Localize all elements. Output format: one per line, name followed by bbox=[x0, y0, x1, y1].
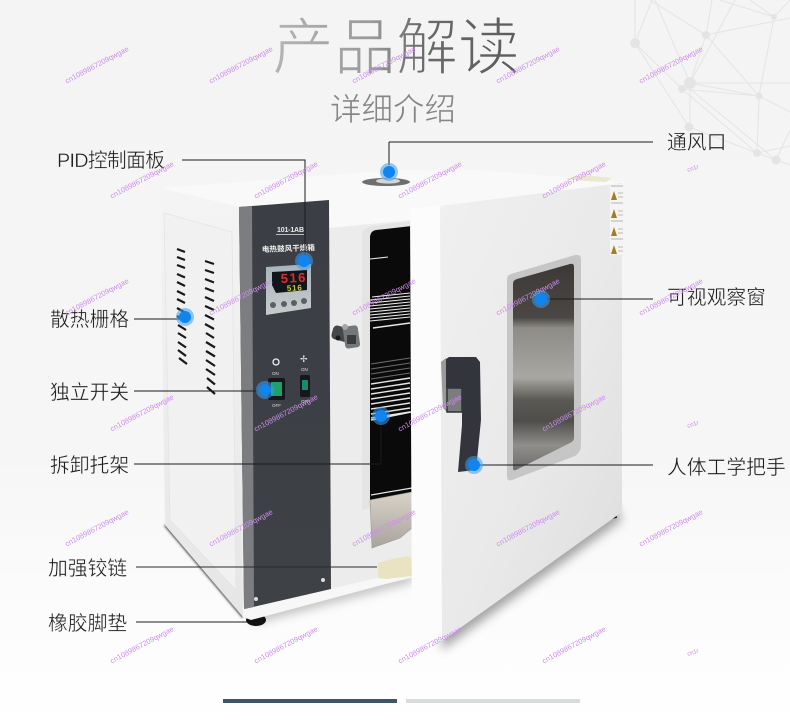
label: removable bracket bbox=[50, 420, 381, 477]
chamber rim bbox=[362, 221, 412, 510]
label: independent switch: 独立开关 bbox=[50, 382, 129, 404]
subtitle: 详细介绍 bbox=[330, 91, 456, 127]
watermarks: cn1r bbox=[687, 420, 700, 430]
watermarks: cn1089867209qwgae bbox=[397, 392, 463, 433]
decorative network graphic bbox=[630, 0, 790, 165]
rear beige knob bbox=[565, 175, 612, 182]
pagination bars bbox=[223, 699, 580, 703]
watermarks bbox=[64, 44, 704, 665]
product name: 电热鼓风干燥箱 bbox=[262, 242, 315, 254]
watermarks: cn1089867209qwgae bbox=[208, 507, 274, 548]
door edge bbox=[410, 205, 442, 642]
watermarks: cn1089867209qwgae bbox=[495, 276, 561, 317]
door hinge bbox=[378, 556, 412, 579]
watermarks: cn1089867209qwgae bbox=[208, 276, 274, 317]
temperature controller bbox=[266, 264, 311, 315]
watermarks: cn1089867209qwgae bbox=[351, 507, 417, 548]
watermarks: cn1089867209qwgae bbox=[253, 392, 319, 433]
oven illustration bbox=[160, 170, 624, 650]
cabinet bottom lip bbox=[243, 570, 412, 620]
fan switch: OFF bbox=[301, 399, 310, 404]
observation window glass bbox=[513, 264, 574, 470]
watermarks: cn1089867209qwgae bbox=[253, 159, 319, 200]
watermarks: cn1089867209qwgae bbox=[638, 507, 704, 548]
oven chamber bbox=[370, 226, 412, 500]
label: heat grille bbox=[50, 309, 180, 331]
watermarks: cn1089867209qwgae bbox=[351, 276, 417, 317]
label: reinforced hinge: 加强铰链 bbox=[48, 558, 127, 580]
watermarks: cn1089867209qwgae bbox=[495, 507, 561, 548]
watermarks: cn1089867209qwgae bbox=[208, 44, 274, 85]
watermarks: cn1089867209qwgae bbox=[638, 44, 704, 85]
watermarks: cn1089867209qwgae bbox=[64, 44, 130, 85]
vent cap on top bbox=[362, 178, 410, 186]
title: 产品解读 bbox=[272, 14, 520, 83]
watermarks: cn1089867209qwgae bbox=[495, 44, 561, 85]
watermarks: cn1089867209qwgae bbox=[541, 159, 607, 200]
watermarks: cn1089867209qwgae bbox=[109, 392, 175, 433]
label: heat grille: 散热栅格 bbox=[50, 309, 129, 331]
power switch bbox=[268, 359, 285, 408]
watermarks: cn1r bbox=[687, 164, 700, 174]
door face bbox=[440, 183, 622, 641]
watermarks: cn1089867209qwgae bbox=[397, 159, 463, 200]
power switch: OFF bbox=[272, 403, 281, 408]
fan switch: ✢ bbox=[300, 354, 308, 364]
observation window frame bbox=[507, 255, 581, 480]
watermarks: cn1089867209qwgae bbox=[351, 44, 417, 85]
side edge shadow bbox=[165, 525, 243, 617]
cabinet front bbox=[329, 220, 412, 596]
panel screws bbox=[254, 578, 325, 601]
cabinet floor shadow bbox=[250, 570, 412, 624]
label: removable bracket: 拆卸托架 bbox=[50, 455, 129, 477]
label: ergonomic handle: 人体工学把手 bbox=[667, 457, 786, 479]
watermarks: cn1089867209qwgae bbox=[64, 507, 130, 548]
label: ventilation port bbox=[389, 132, 726, 165]
door floor shadow bbox=[440, 500, 622, 650]
label: rubber foot: 橡胶脚垫 bbox=[48, 613, 127, 635]
watermarks: cn1089867209qwgae bbox=[109, 624, 175, 665]
warning labels bbox=[610, 184, 624, 255]
fan switch: ON bbox=[301, 367, 308, 372]
model text: 101-1AB bbox=[277, 227, 304, 234]
temperature controller: 516 bbox=[280, 270, 307, 286]
control panel side strip bbox=[239, 206, 254, 609]
door handle bbox=[441, 357, 481, 472]
fan switch bbox=[300, 354, 310, 404]
door foot bbox=[604, 512, 617, 520]
watermarks: cn1089867209qwgae bbox=[638, 276, 704, 317]
rubber foot bbox=[246, 614, 266, 626]
label: PID control panel: PID控制面板 bbox=[57, 150, 165, 172]
blue hotspot markers bbox=[176, 163, 550, 474]
watermarks: cn1r bbox=[687, 648, 700, 658]
temperature controller: 516 bbox=[287, 283, 303, 293]
watermarks: cn1089867209qwgae bbox=[397, 624, 463, 665]
watermarks: cn1089867209qwgae bbox=[541, 392, 607, 433]
door latch bbox=[331, 324, 360, 349]
watermarks: cn1089867209qwgae bbox=[541, 624, 607, 665]
watermarks: cn1089867209qwgae bbox=[253, 624, 319, 665]
shelves bbox=[370, 257, 412, 495]
watermarks: cn1089867209qwgae bbox=[64, 276, 130, 317]
cabinet left side bbox=[160, 188, 243, 617]
watermarks: cn1089867209qwgae bbox=[109, 159, 175, 200]
ventilation slots bbox=[177, 249, 215, 394]
side inset panel bbox=[164, 213, 236, 590]
power switch: ON bbox=[272, 371, 279, 376]
control panel bbox=[239, 200, 331, 609]
label: PID control panel bbox=[57, 150, 305, 255]
bottom tray bbox=[370, 492, 412, 548]
label: viewing window: 可视观察窗 bbox=[667, 287, 766, 309]
cabinet top bbox=[160, 170, 622, 232]
label: ventilation port: 通风口 bbox=[667, 132, 726, 154]
